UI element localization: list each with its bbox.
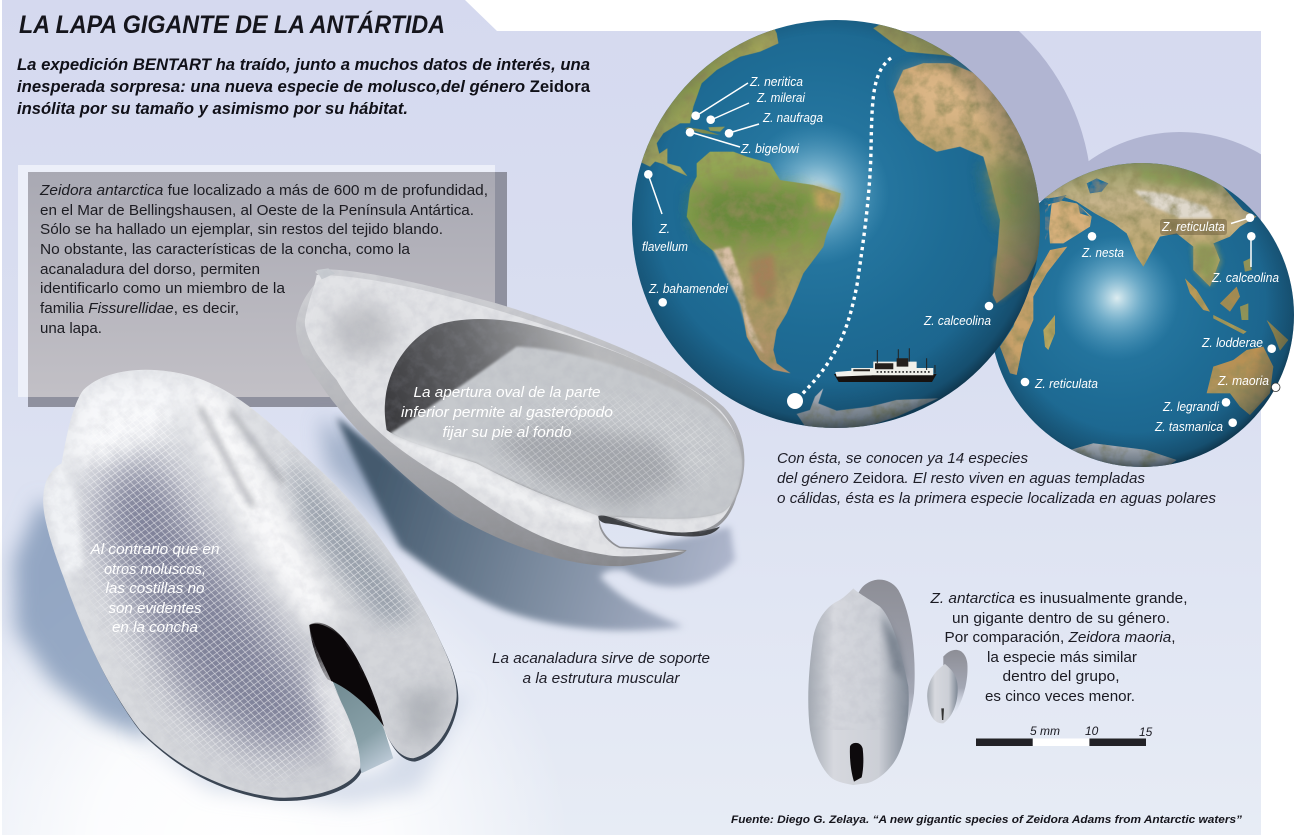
- globe: Atlantic Ocean: [632, 17, 1050, 433]
- scale bar: 5 mm: [1030, 724, 1060, 738]
- species labels: Z. bigelowi: [740, 142, 800, 156]
- subtitle: inesperada sorpresa: una nueva especie de molusco,del género Zeidora: [17, 78, 591, 96]
- intro text: [39, 183, 488, 337]
- size comparison text: Por comparación, Zeidora maoria ,: [944, 630, 1176, 646]
- species labels: [1034, 219, 1279, 434]
- subtitle: La expedición BENTART ha traído, junto a muchos datos de interés, una: [17, 56, 590, 74]
- caption: species count: Con ésta, se conocen ya 14 especies: [777, 451, 1028, 467]
- intro text: acanaladura del dorso, permiten: [40, 262, 260, 278]
- species labels: Z. calceolina: [1211, 271, 1279, 285]
- species labels: Z. calceolina: [923, 314, 991, 328]
- size comparison text: dentro del grupo,: [1002, 669, 1120, 685]
- label: aperture note: La apertura oval de la parte: [414, 385, 600, 401]
- species labels: Z. tasmanica: [1154, 420, 1223, 434]
- intro text: una lapa.: [40, 321, 102, 337]
- intro text: familia Fissurellidae, es decir,: [40, 301, 239, 317]
- species markers: [644, 83, 993, 409]
- species labels: Z. legrandi: [1162, 400, 1220, 414]
- species labels: Z. bahamendei: [648, 282, 729, 296]
- species labels: flavellum: [642, 240, 688, 254]
- intro text: No obstante, las características de la concha, como la: [40, 242, 411, 258]
- label: groove note: [492, 651, 710, 687]
- scale bar: [976, 724, 1153, 746]
- label: aperture note: [401, 385, 613, 441]
- species labels: Z. naufraga: [762, 111, 823, 125]
- label: aperture note: fijar su pie al fondo: [442, 425, 572, 441]
- intro text: Zeidora antarctica fue localizado a más de 600 m de profundidad,: [39, 183, 488, 199]
- panel: intro text box: [18, 165, 507, 407]
- shell: dorsal view: [30, 360, 460, 801]
- label: ribs note: las costillas no: [106, 581, 204, 597]
- species markers: [1021, 213, 1280, 427]
- globe: Indian Ocean: [990, 157, 1294, 477]
- label: aperture note: inferior permite al gasterópodo: [401, 405, 613, 421]
- intro text: Sólo se ha hallado un ejemplar, sin restos del tejido blando.: [40, 222, 443, 238]
- species labels: Z. milerai: [756, 91, 806, 105]
- shadow: open shell: [320, 417, 735, 630]
- continents: Americas, Africa, Antarctica: [633, 17, 1050, 433]
- scale bar: 10: [1085, 724, 1099, 738]
- subtitle: insólita por su tamaño y asimismo por su hábitat.: [17, 100, 408, 118]
- label: ribs note: son evidentes: [108, 601, 202, 617]
- size comparison text: es cinco veces menor.: [985, 689, 1135, 705]
- species labels: Z. lodderae: [1201, 336, 1263, 350]
- caption: species count: o cálidas, ésta es la primera especie localizada en aguas polares: [777, 491, 1216, 507]
- species labels: Z.: [658, 222, 670, 236]
- species labels: Z. reticulata: [1034, 377, 1098, 391]
- shell comparison: Z. antarctica and Z. maoria: [805, 580, 968, 785]
- caption: species count: [777, 451, 1216, 507]
- label: groove note: a la estrutura muscular: [522, 671, 681, 687]
- source: Fuente: Diego G. Zelaya. “A new gigantic species of Zeidora Adams from Antarctic waters”: [731, 814, 1243, 826]
- shadow: large shell left: [14, 500, 470, 805]
- species labels: Z. reticulata: [1161, 220, 1225, 234]
- label: ribs note: otros moluscos,: [104, 562, 206, 578]
- scale bar: 15: [1139, 725, 1153, 739]
- label: groove note: La acanaladura sirve de soporte: [492, 651, 710, 667]
- caption: species count: del género Zeidora. El resto viven en aguas templadas: [777, 471, 1145, 487]
- intro text: identificarlo como un miembro de la: [40, 281, 286, 297]
- route: expedition dotted line: [795, 58, 891, 401]
- label: ribs note: [89, 542, 219, 636]
- label: ribs note: en la concha: [112, 620, 198, 636]
- species labels: Z. nesta: [1081, 246, 1124, 260]
- globe shadows: [903, 31, 1261, 220]
- icon: research ship: [834, 348, 937, 382]
- species labels: Z. maoria: [1217, 374, 1269, 388]
- species labels: [642, 75, 991, 328]
- size comparison text: la especie más similar: [987, 650, 1137, 666]
- continents: Asia, Africa, Australia, Antarctica: [1000, 157, 1288, 477]
- size comparison text: un gigante dentro de su género.: [952, 611, 1170, 627]
- title: LA LAPA GIGANTE DE LA ANTÁRTIDA: [19, 10, 445, 39]
- size comparison text: [929, 591, 1188, 705]
- species labels: Z. neritica: [749, 75, 803, 89]
- size comparison text: Z. antarctica es inusualmente grande,: [929, 591, 1188, 607]
- intro text: en el Mar de Bellingshausen, al Oeste de la Península Antártica.: [40, 203, 474, 219]
- shell: open view showing aperture: [296, 268, 744, 566]
- subtitle: [17, 56, 591, 118]
- label: ribs note: Al contrario que en: [89, 542, 219, 558]
